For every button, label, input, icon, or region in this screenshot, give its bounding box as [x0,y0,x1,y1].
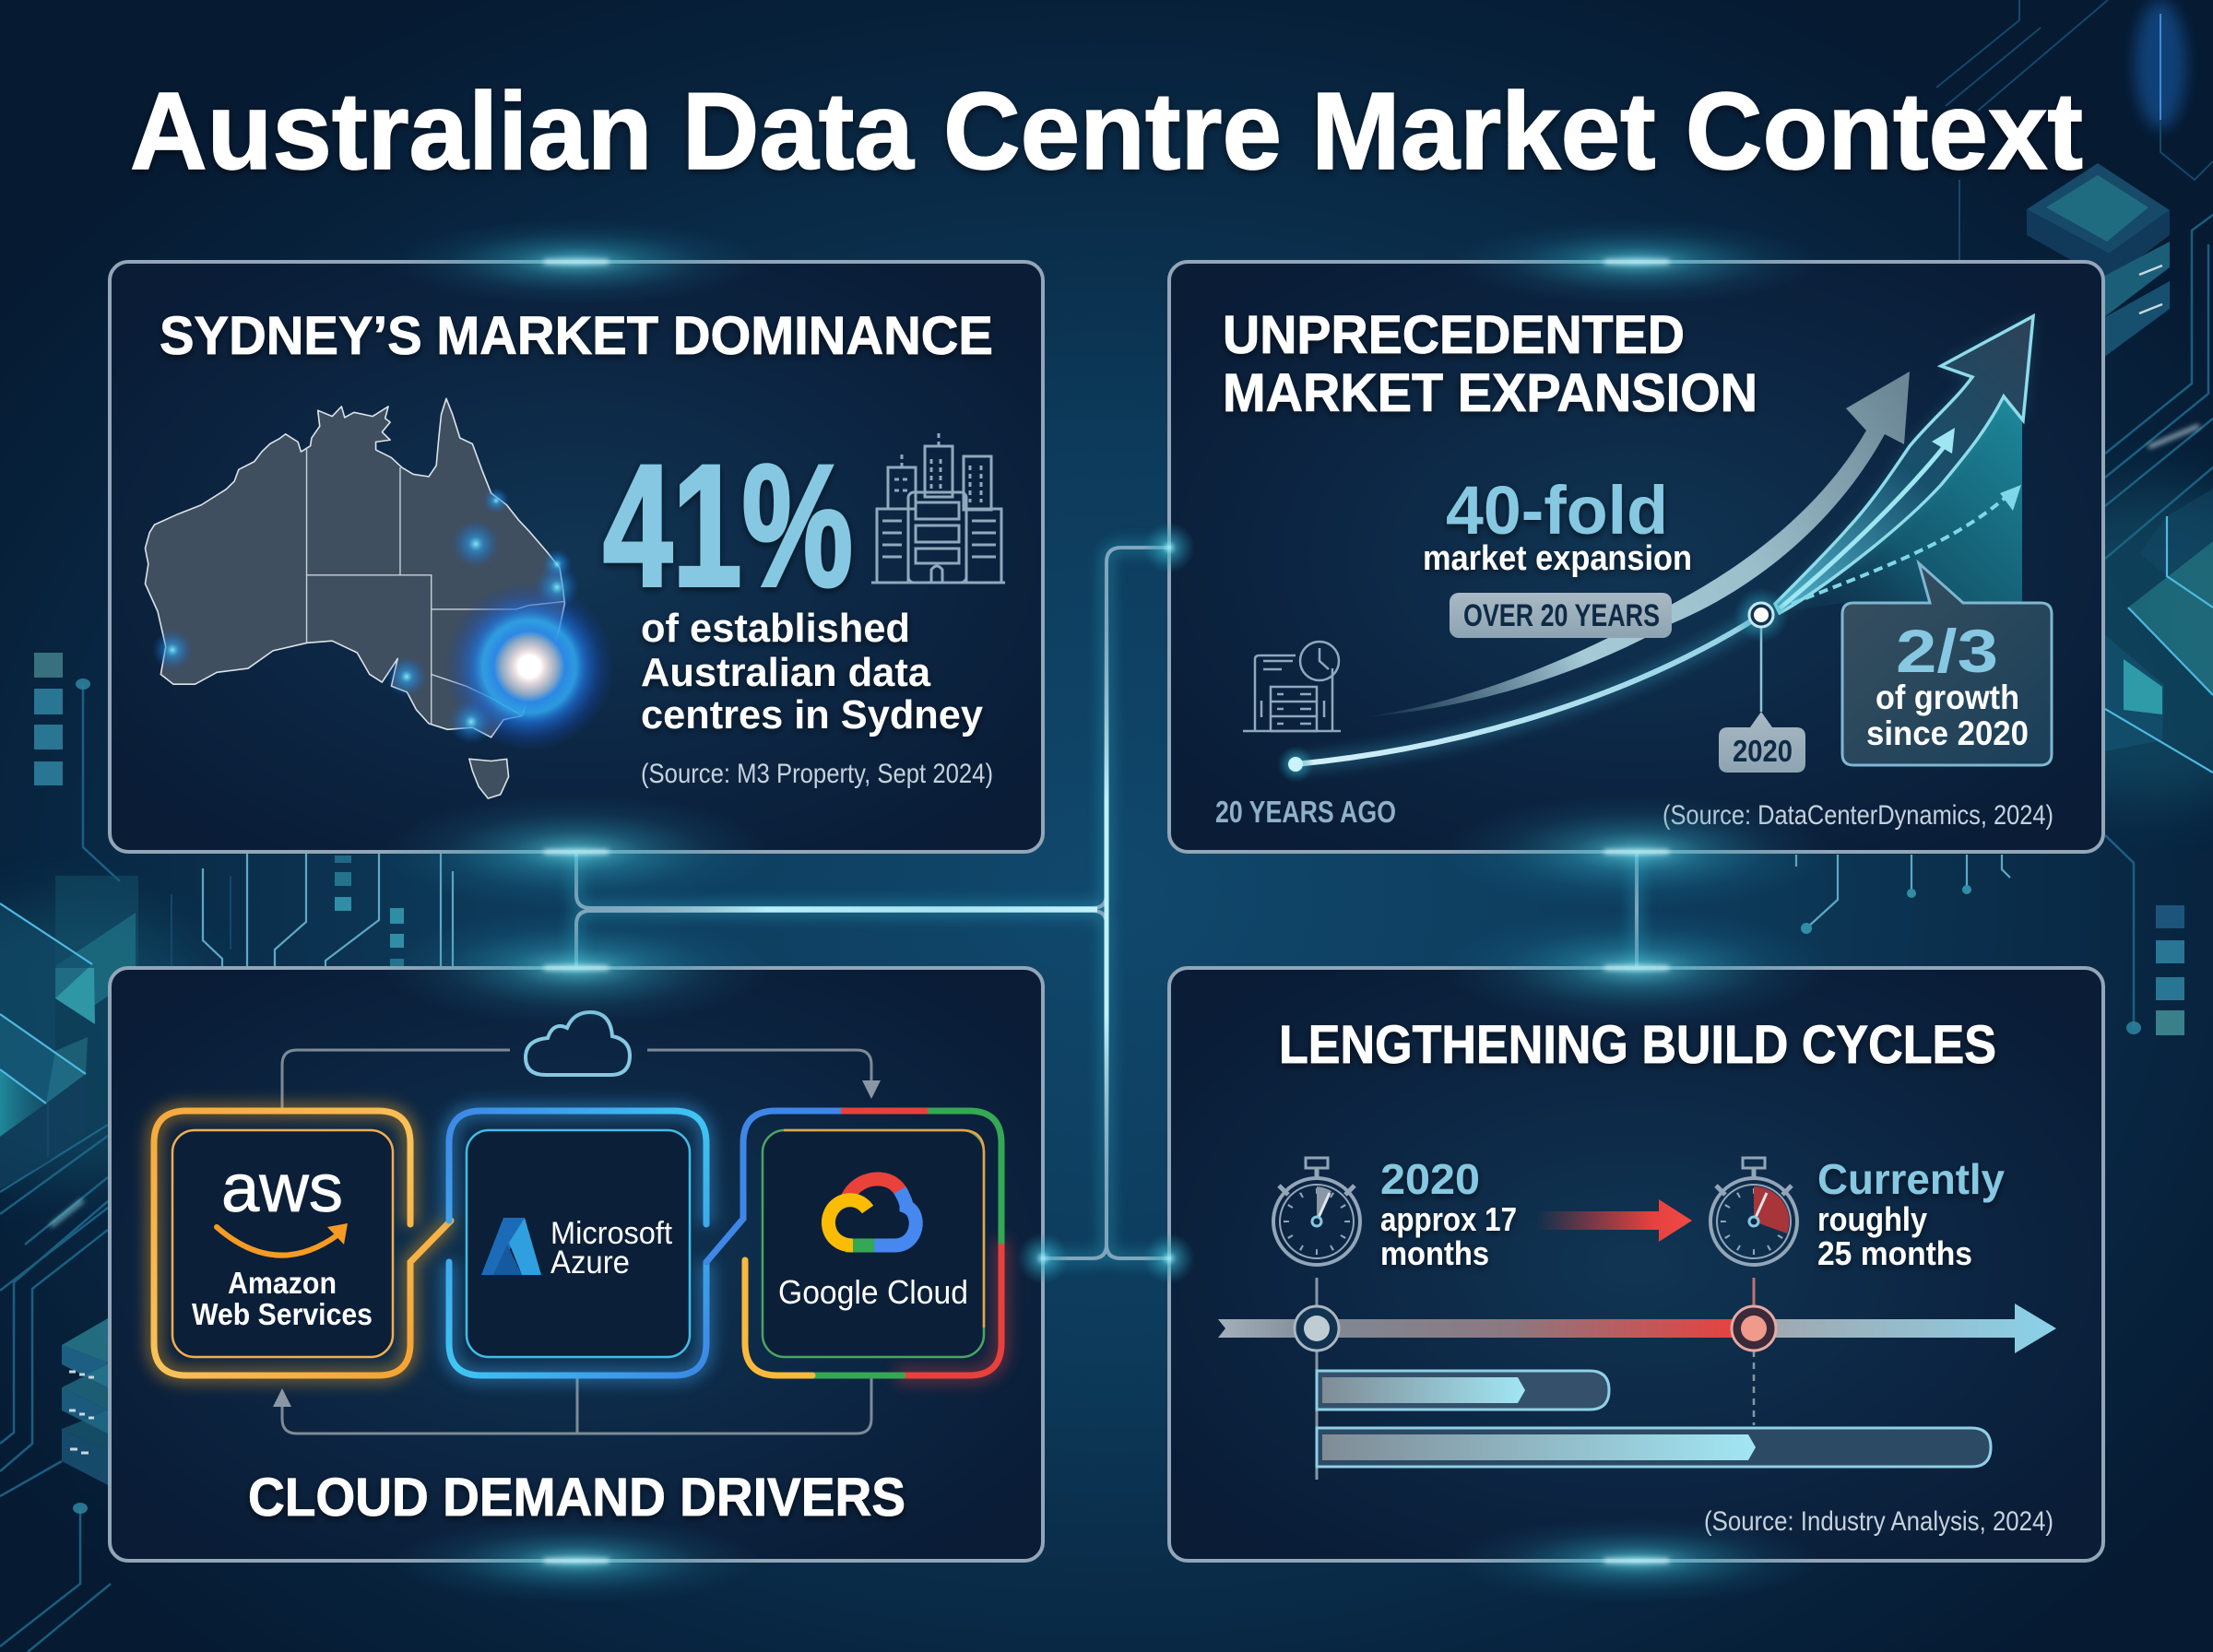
card: AWS [154,1111,451,1375]
over 20 years label: OVER 20 YEARS [1463,598,1660,633]
2020 label [1719,712,1805,773]
description text [641,606,984,738]
icon: server and clock [1243,642,1341,731]
left glass plates [55,876,138,1005]
card: AWS: aws [221,1150,343,1226]
source note: (Source: DataCenterDynamics, 2024) [1663,800,2053,831]
icon: stopwatch current [1710,1158,1797,1265]
arrow: red increase [1536,1199,1692,1242]
40-fold statistic: 40-fold [1446,472,1668,549]
card: AWS: Web Services [192,1297,373,1331]
glow points on panels [383,219,1830,1603]
source note: (Source: M3 Property, Sept 2024) [641,759,993,789]
icon: stopwatch 2020 [1273,1158,1360,1265]
title: Australian Data Centre Market Context [130,70,2083,193]
panel heading: UNPRECEDENTED [1223,305,1685,365]
panel heading: CLOUD DEMAND DRIVERS [248,1468,905,1528]
panel heading [1223,305,1757,423]
current build time: Currently [1817,1155,2005,1203]
panel heading: LENGTHENING BUILD CYCLES [1279,1015,1996,1075]
growth arrows chart [1277,316,2033,783]
2020 build time: months [1380,1234,1489,1272]
callout: two thirds of growth: of growth [1876,678,2019,716]
bar: 25 month build [1317,1428,1991,1467]
bar: 17 month build [1317,1371,1609,1410]
card: Microsoft Azure [449,1111,706,1375]
current build time: 25 months [1817,1234,1972,1272]
panel: Sydney's market dominance [110,262,1043,852]
20 years ago label: 20 YEARS AGO [1215,795,1396,829]
2020 build time [1380,1155,1517,1272]
timeline arrow [1218,1278,2056,1480]
callout: two thirds of growth [1842,563,2052,765]
2020 label: 2020 [1733,734,1793,768]
2020 build time: 2020 [1380,1155,1480,1203]
description text: of established [641,606,910,651]
icon: data centre city buildings [871,431,1005,583]
card: AWS: Amazon [228,1266,337,1300]
current build time: roughly [1817,1200,1927,1238]
Australia map with data centre hotspots [145,398,614,798]
left server stack [62,1318,108,1485]
panel: cloud demand drivers [110,968,1043,1561]
over 20 years label [1450,593,1672,638]
right glass plates [2128,541,2213,695]
connector lines [576,548,1637,1258]
flow lines and arrows [273,1050,881,1434]
card: Google Cloud: Google Cloud [778,1273,968,1311]
callout: two thirds of growth: since 2020 [1866,714,2029,752]
between-panel circuits [203,852,2010,966]
card: Google Cloud [706,1111,1001,1375]
card: Microsoft Azure: Microsoft [550,1216,673,1251]
description text: centres in Sydney [641,692,984,738]
card: Microsoft Azure: Azure [550,1245,630,1280]
current build time [1817,1155,2005,1272]
panel: unprecedented market expansion [1169,262,2103,852]
source note: (Source: Industry Analysis, 2024) [1704,1506,2053,1537]
panel heading: MARKET EXPANSION [1223,363,1757,423]
40-fold statistic: market expansion [1423,539,1692,578]
41% statistic: 41% [603,429,853,622]
icon: cloud [526,1012,630,1075]
2020 build time: approx 17 [1380,1200,1517,1238]
panel: lengthening build cycles [1169,968,2103,1561]
40-fold statistic [1423,472,1692,578]
panel heading: SYDNEY’S MARKET DOMINANCE [160,306,993,366]
callout: two thirds of growth: 2/3 [1896,617,1998,685]
description text: Australian data [641,650,931,695]
right server stack [2027,163,2170,358]
